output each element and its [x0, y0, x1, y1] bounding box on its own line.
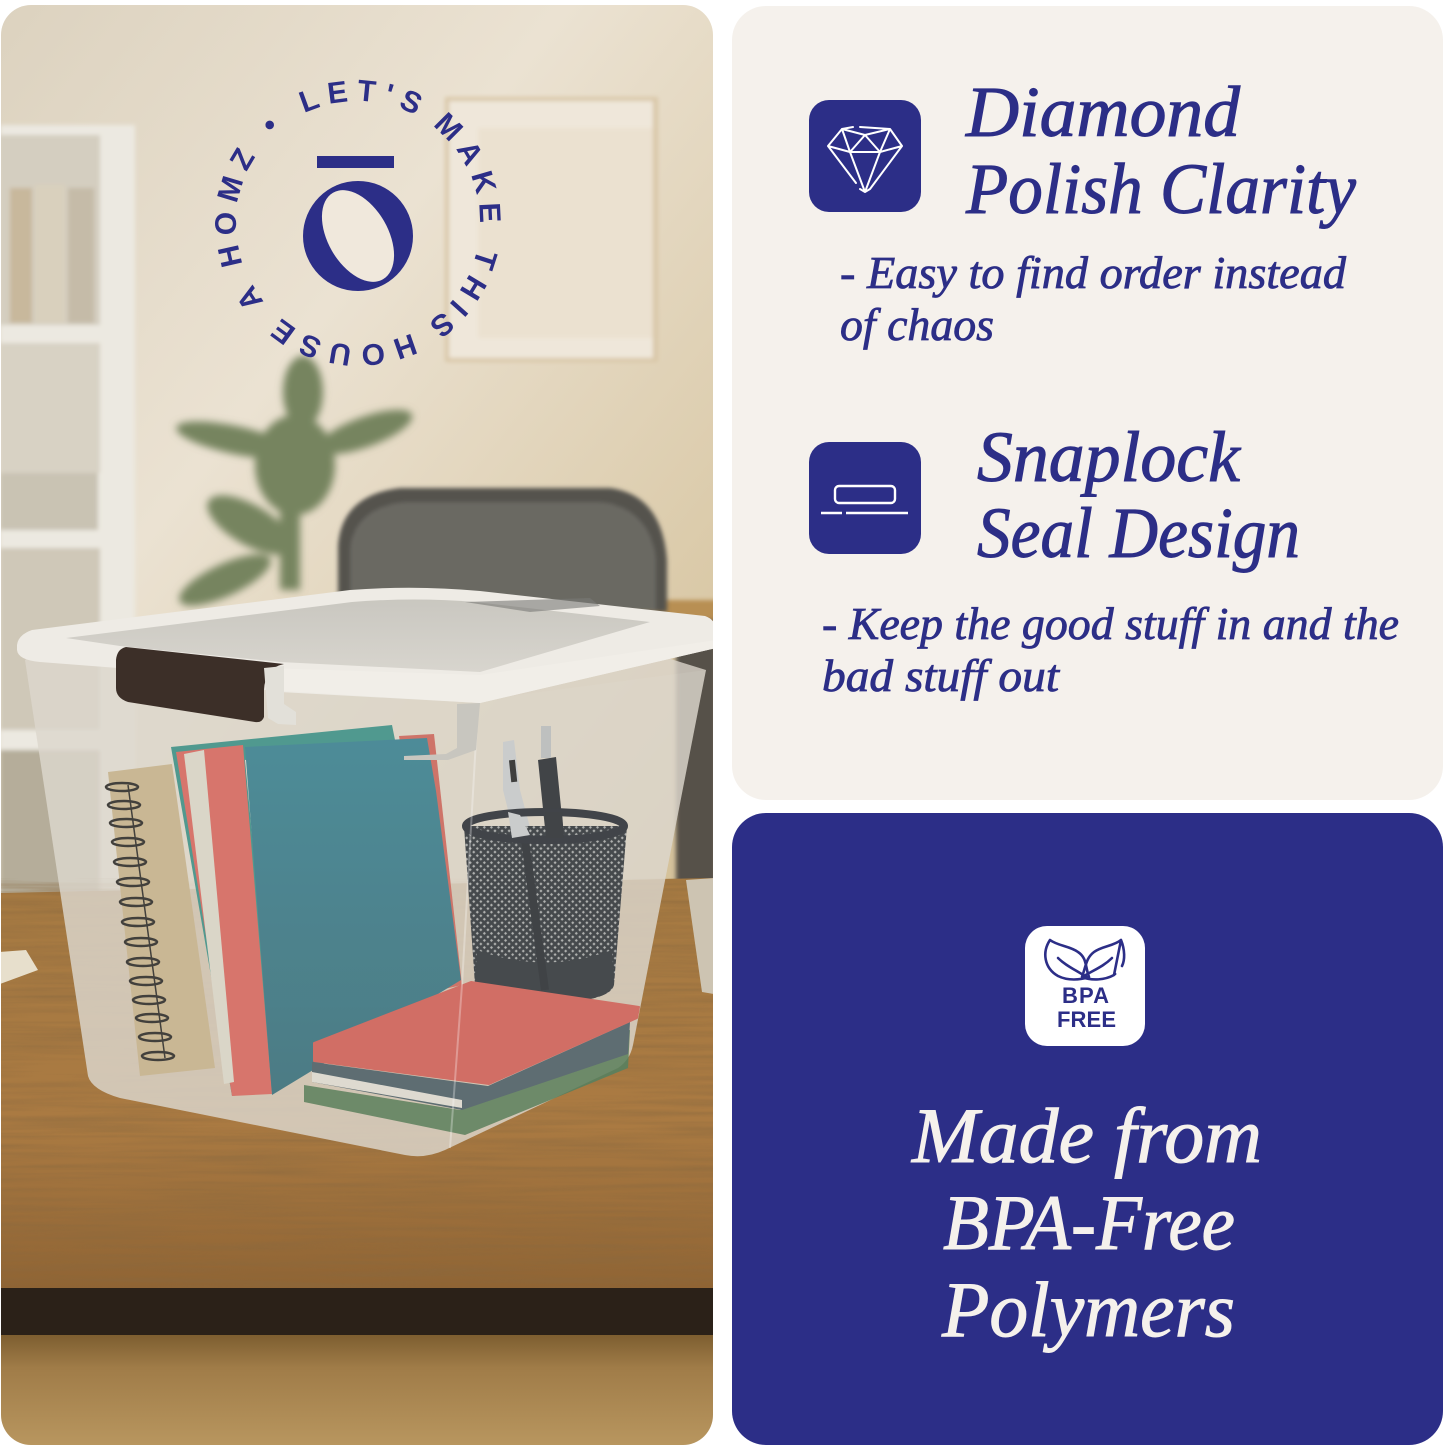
logo ring	[303, 181, 413, 291]
logo badge: •LET'SMAKE THISHOUSEAHOMZ	[215, 80, 501, 366]
dark latch handle	[116, 647, 284, 722]
blurred shelf	[0, 125, 135, 895]
panel: features	[732, 6, 1443, 800]
body corner highlight	[450, 705, 478, 1148]
wire pen holder	[464, 812, 627, 1003]
wooden desk	[0, 878, 714, 1445]
text: snaplock description: bad stuff out	[822, 650, 1060, 701]
icon: diamond	[809, 100, 921, 212]
panel: product photo	[1, 5, 713, 1445]
heading: diamond polish clarity: Polish Clarity	[965, 149, 1356, 229]
red book	[171, 725, 396, 1096]
icon: BPA free: FREE	[1057, 1007, 1116, 1032]
blurred plant	[173, 356, 417, 616]
stacked books	[304, 982, 639, 1135]
panel: BPA free	[732, 813, 1443, 1445]
metal hook	[404, 703, 480, 760]
latch tab	[264, 666, 296, 725]
office chair	[338, 488, 667, 612]
red tab	[399, 734, 462, 990]
text: diamond description	[840, 247, 1347, 350]
text: snaplock description: - Keep the good stuff in and the	[822, 598, 1399, 649]
text: diamond description: of chaos	[840, 299, 994, 350]
paper on desk	[0, 950, 38, 984]
heading: made from BPA-free polymers: BPA-Free	[943, 1179, 1235, 1266]
storage box	[17, 588, 716, 1156]
heading: diamond polish clarity	[965, 72, 1356, 229]
wall art frame	[445, 97, 658, 362]
heading: snaplock seal design	[977, 417, 1300, 573]
heading: snaplock seal design: Snaplock	[977, 417, 1242, 497]
desk background right	[646, 597, 713, 879]
icon: BPA free: BPA	[1062, 983, 1109, 1008]
spiral notebook	[106, 764, 215, 1076]
heading: made from BPA-free polymers	[911, 1092, 1262, 1353]
logo inner ellipse	[322, 190, 394, 282]
heading: snaplock seal design: Seal Design	[977, 493, 1300, 573]
icon: BPA free	[1025, 926, 1145, 1046]
icon: snaplock	[809, 442, 921, 554]
logo bar	[317, 156, 394, 168]
text: diamond description: - Easy to find order instead	[840, 247, 1347, 298]
clear lid	[17, 588, 716, 703]
translucent box body	[104, 725, 640, 1135]
pens	[503, 726, 562, 826]
circular tagline	[236, 101, 480, 345]
background wall	[0, 0, 714, 900]
heading: made from BPA-free polymers: Polymers	[941, 1266, 1235, 1353]
heading: diamond polish clarity: Diamond	[965, 72, 1241, 152]
teal folder	[245, 738, 461, 1095]
laptop edge	[686, 878, 714, 994]
heading: made from BPA-free polymers: Made from	[911, 1092, 1262, 1179]
text: snaplock description	[822, 598, 1399, 701]
box back tint	[25, 659, 706, 1156]
